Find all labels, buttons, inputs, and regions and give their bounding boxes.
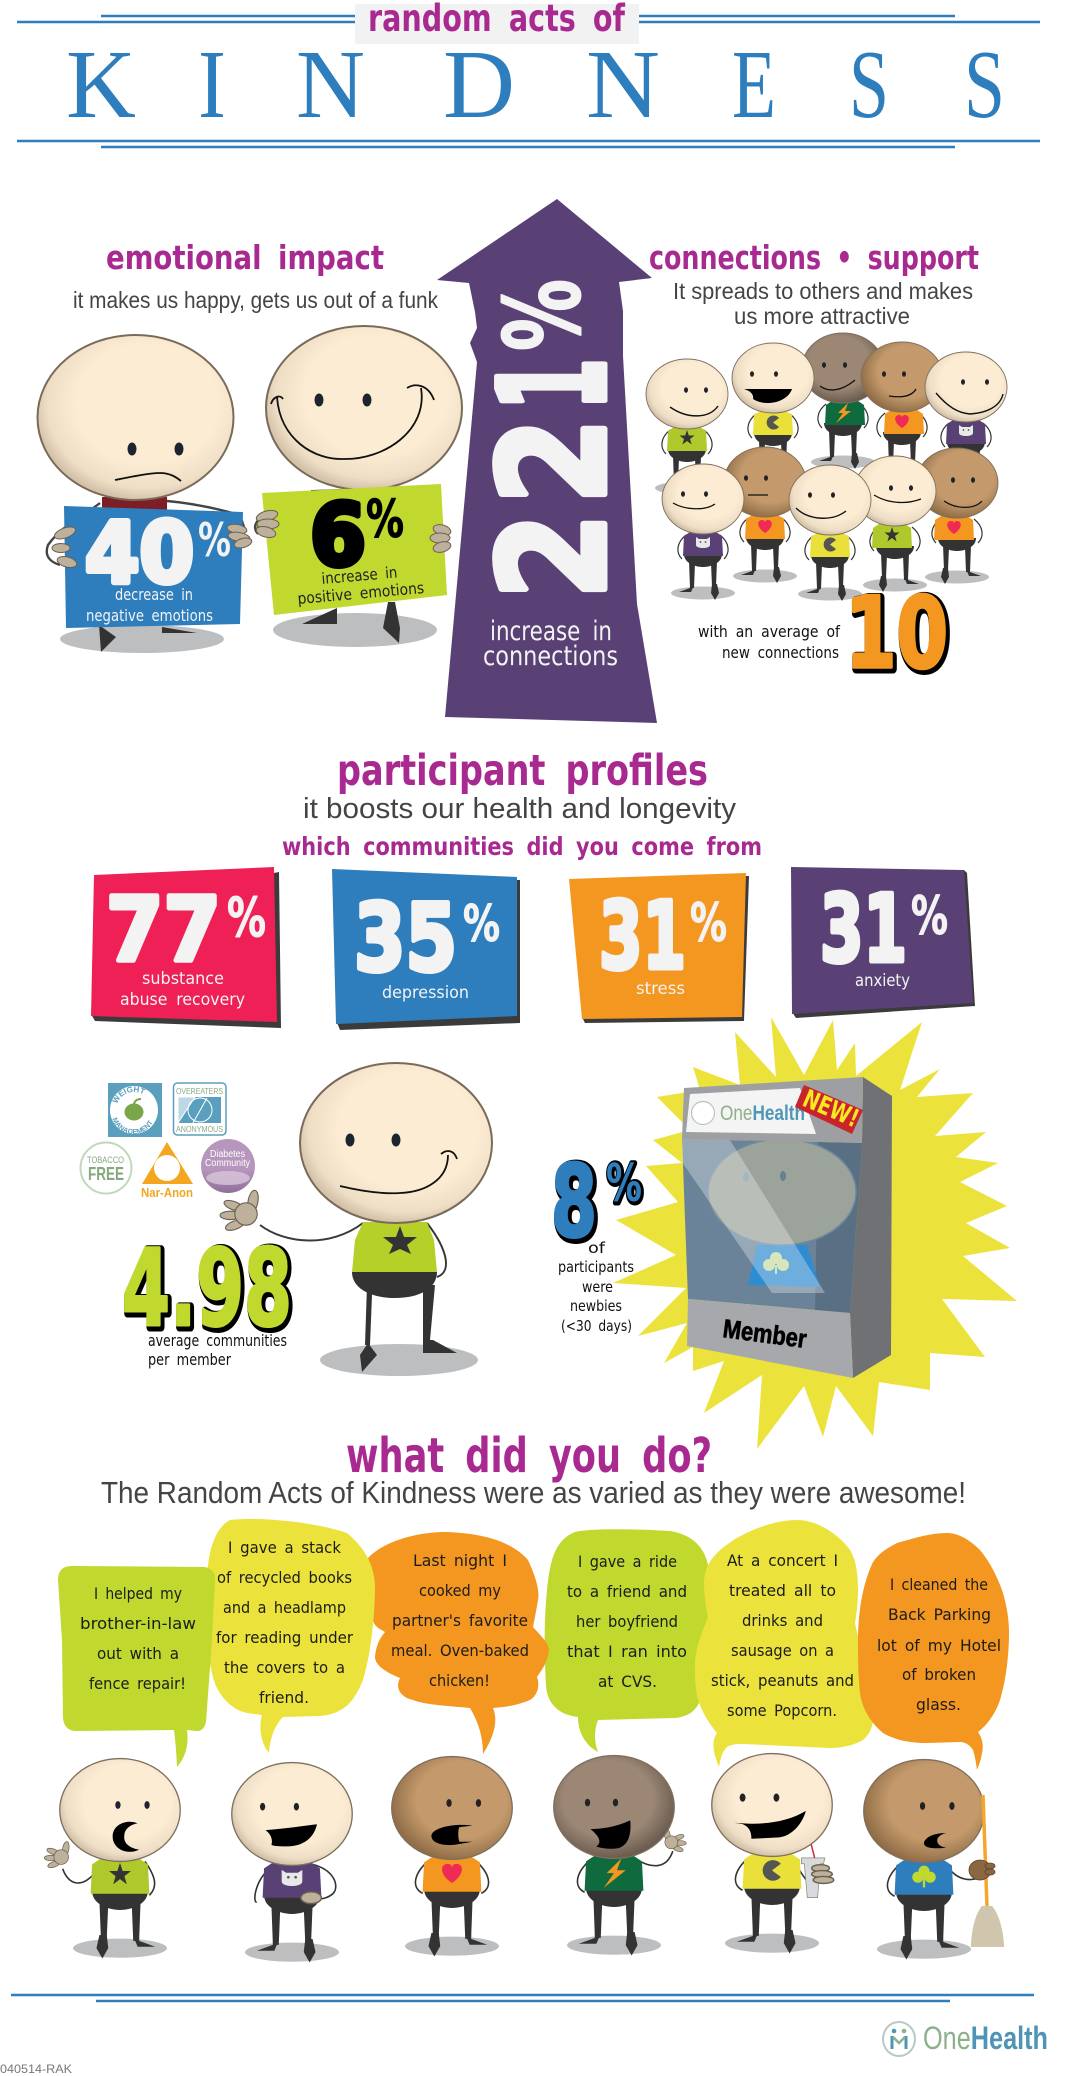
bubble text 3: meal. Oven-baked	[391, 1641, 529, 1660]
panel: emotional impact	[38, 238, 462, 653]
heading: what did you do?: what did you do?	[346, 1428, 712, 1484]
bubble text 5: At a concert I	[727, 1551, 838, 1570]
logo: tobacco free: TOBACCO	[87, 1155, 124, 1165]
header: title block	[17, 0, 1040, 147]
character: happy with 6% sign	[255, 326, 462, 647]
caption: average communities per member	[148, 1331, 287, 1369]
label line 2: connections	[483, 641, 618, 672]
bubble text 4: her boyfriend	[576, 1612, 678, 1631]
stat: 4.98: 4.98	[122, 1227, 292, 1350]
bubble text 5: sausage on a	[731, 1641, 834, 1660]
caption: of participants were newbies: were	[582, 1278, 613, 1296]
bubble text 6: glass.	[916, 1695, 961, 1714]
card: 31% anxiety: %	[911, 886, 948, 947]
bubble text 3: cooked my	[419, 1581, 501, 1600]
label: increase in connections: increase in	[490, 616, 612, 647]
big number: 221%: 2	[469, 513, 639, 599]
bubble text 1: I helped my	[94, 1584, 182, 1603]
panel: connections and support	[646, 238, 1007, 693]
logo: tobacco free: FREE	[88, 1164, 124, 1184]
character 5: speaking, drink in hand	[712, 1754, 834, 1953]
big number: 221%	[469, 279, 639, 599]
bubble text 2: friend.	[259, 1688, 309, 1707]
logo: nar-anon: Nar-Anon	[141, 1185, 193, 1200]
title: KINDNESS: N	[296, 31, 365, 138]
big number: 221%: 1	[469, 358, 639, 410]
card: 31% anxiety: 31	[820, 875, 907, 983]
title: KINDNESS: E	[732, 31, 776, 138]
bubble text 2: for reading under	[216, 1628, 353, 1647]
stat: 8%: 8	[551, 1143, 597, 1260]
caption: of participants were newbies: (<30 days)	[561, 1317, 632, 1335]
bubble text 3: Last night I	[413, 1551, 507, 1570]
NEW! badge	[795, 1085, 863, 1134]
bubble text 6	[877, 1575, 1001, 1714]
title: KINDNESS: S	[964, 31, 1005, 138]
character 3: speaking, heart shirt	[392, 1757, 512, 1956]
title: KINDNESS: N	[586, 31, 660, 138]
character: sad with 40% sign	[38, 335, 253, 653]
card: 35% depression: 35	[354, 884, 457, 992]
character: member with star shirt	[220, 1063, 492, 1376]
subheading: us more attractive	[734, 303, 910, 329]
logo: weight management: WEIGHT	[112, 1086, 146, 1103]
card: 31% anxiety: anxiety	[855, 971, 910, 991]
big number: 10: 10	[845, 577, 948, 691]
starburst	[613, 1017, 1017, 1449]
box text: NEW!: NEW!	[799, 1084, 863, 1133]
big number: 221%: %	[482, 279, 604, 351]
sign: 40%: decrease in	[115, 585, 193, 604]
sign: 6%: 6	[310, 486, 366, 586]
logo: weight management: MANAGEMENT	[112, 1117, 152, 1134]
icon: mop	[969, 1795, 1004, 1947]
character 6: speaking, with mop	[864, 1760, 1004, 1959]
speech bubbles	[58, 1519, 1009, 1770]
stat: 8%: 8	[553, 1145, 599, 1262]
header rules top	[17, 16, 1040, 22]
bubble text 5	[711, 1551, 854, 1720]
bubble text 3	[391, 1551, 529, 1690]
sign: 6%	[262, 484, 447, 615]
bubble text 1	[80, 1584, 196, 1693]
logo: weight management	[108, 1083, 162, 1137]
sign: 6%: positive emotions	[297, 579, 425, 608]
card: 77% substance abuse recovery: abuse recovery	[120, 990, 245, 1010]
bubble text 4: that I ran into	[567, 1642, 687, 1661]
sign: 40%	[64, 504, 243, 628]
stat: 8%: %	[606, 1154, 642, 1214]
logo: OneHealth	[883, 2020, 1048, 2056]
bubble text 1: fence repair!	[89, 1674, 186, 1693]
card: 31% stress: stress	[636, 979, 685, 999]
bubble text 5: treated all to	[729, 1581, 836, 1600]
caption: of participants were newbies	[558, 1239, 634, 1335]
hands	[255, 508, 452, 554]
sign: 6%: %	[366, 490, 404, 550]
bubble text 2: and a headlamp	[223, 1598, 346, 1617]
sign: 40%: %	[198, 513, 231, 567]
bubble text 3: partner's favorite	[392, 1611, 528, 1630]
card: 77% substance abuse recovery: %	[227, 886, 266, 949]
heading: participant profiles: participant profiles	[337, 746, 708, 796]
bubble text 3: chicken!	[429, 1671, 490, 1690]
box text: Member: Member	[721, 1313, 808, 1354]
card: 77% substance abuse recovery: 77	[106, 878, 221, 981]
bubble text 5: some Popcorn.	[727, 1701, 837, 1720]
card: 35% depression: %	[463, 895, 500, 953]
character 1: speaking, star shirt	[44, 1759, 180, 1958]
footer	[0, 1995, 1048, 2076]
logo: diabetes community: Diabetes	[210, 1149, 245, 1160]
character 2: speaking, owl shirt	[232, 1763, 352, 1962]
caption: of participants were newbies: participants	[558, 1258, 634, 1276]
bubble text 2: the covers to a	[224, 1658, 345, 1677]
box logo ring	[692, 1102, 714, 1124]
arrow: 221% increase in connections	[437, 199, 657, 723]
subheading: It spreads to others and makes	[673, 278, 973, 304]
card: 77% substance abuse recovery: substance	[142, 969, 224, 989]
sign: 40%: negative emotions	[86, 606, 213, 625]
subheading: boosts health: it boosts our health and longevity	[303, 793, 737, 825]
hands	[52, 523, 253, 569]
stat: 8%: %	[607, 1155, 643, 1215]
card: 31% stress: 31	[599, 882, 686, 990]
bubble text 6: Back Parking	[888, 1605, 991, 1624]
card: 31% anxiety	[791, 867, 975, 1018]
caption: of participants were newbies: of	[588, 1239, 606, 1257]
logo: diabetes community: Community	[205, 1158, 250, 1169]
card: 35% depression: depression	[382, 983, 469, 1003]
sign: 6%: increase in	[321, 563, 398, 588]
card: 31% stress	[569, 873, 749, 1023]
bubble text 4: I gave a ride	[578, 1552, 677, 1571]
title: KINDNESS: I	[198, 31, 226, 138]
bubble text 1: brother-in-law	[80, 1614, 196, 1633]
title tag background	[355, 4, 639, 44]
stat: 4.98: 4.98	[124, 1229, 294, 1352]
section: what did you do	[44, 1428, 1009, 1962]
section: participant profiles	[80, 746, 1017, 1449]
caption: new connections: new connections	[722, 643, 839, 662]
big number: 221%: 2	[469, 418, 639, 504]
bubble text 2: I gave a stack	[228, 1538, 342, 1557]
group of characters	[646, 333, 1007, 601]
heading: emotional impact: emotional impact	[106, 238, 384, 277]
subheading: it makes us happy, gets us out of a funk	[73, 287, 438, 313]
logo: overeaters anonymous: ANONYMOUS	[176, 1125, 223, 1134]
card: 77% substance abuse recovery	[91, 867, 281, 1028]
bubble text 4: at CVS.	[598, 1672, 657, 1691]
bubble text 6: lot of my Hotel	[877, 1636, 1001, 1655]
title: KINDNESS: D	[443, 31, 515, 138]
title: KINDNESS	[66, 31, 1005, 138]
community logos	[80, 1082, 255, 1200]
bubble text 6: I cleaned the	[890, 1575, 988, 1594]
stat: 4.98	[122, 1227, 294, 1352]
subheading: The Random Acts of Kindness were as varied as they were awesome!	[101, 1475, 966, 1510]
bubble text 2: of recycled books	[217, 1568, 352, 1587]
caption: average communities per member: average communities	[148, 1331, 287, 1350]
logo: OneHealth: OneHealth	[923, 2020, 1048, 2056]
caption: with an average of: with an average of	[698, 622, 840, 641]
member toy box	[682, 1077, 892, 1378]
caption: of participants were newbies: newbies	[570, 1297, 622, 1315]
bubble text 6: of broken	[902, 1665, 976, 1684]
code: 040514-RAK: 040514-RAK	[0, 2062, 72, 2076]
big number: 10: 10	[847, 579, 950, 693]
bubble text 4: to a friend and	[567, 1582, 687, 1601]
subheading	[673, 278, 973, 329]
card: 35% depression	[332, 869, 520, 1030]
logo: overeaters anonymous: OVEREATERS	[176, 1087, 223, 1096]
box text: OneHealth: OneHealth	[720, 1102, 805, 1125]
logo: overeaters anonymous	[174, 1083, 226, 1135]
card: 31% stress: %	[690, 893, 727, 954]
bubble text 2	[216, 1538, 353, 1707]
sign: 40%: 40	[85, 504, 194, 602]
header rules bottom	[17, 141, 1040, 147]
title: KINDNESS: S	[849, 31, 889, 138]
bubble text 5: stick, peanuts and	[711, 1671, 854, 1690]
logo: diabetes community	[201, 1139, 255, 1193]
logo: tobacco free	[80, 1142, 132, 1194]
subheading: which communities: which communities did you come from	[282, 832, 762, 861]
heading: connections support: connections • support	[649, 238, 979, 277]
logo: nar-anon	[141, 1142, 193, 1200]
bubble text 5: drinks and	[742, 1611, 823, 1630]
character 4: speaking, lightning shirt	[554, 1756, 686, 1955]
caption: average communities per member: per member	[148, 1350, 231, 1369]
bubble text 1: out with a	[97, 1644, 179, 1663]
footer rules	[11, 1995, 1034, 2001]
title: KINDNESS: K	[66, 31, 136, 138]
bubble text 4	[567, 1552, 687, 1691]
